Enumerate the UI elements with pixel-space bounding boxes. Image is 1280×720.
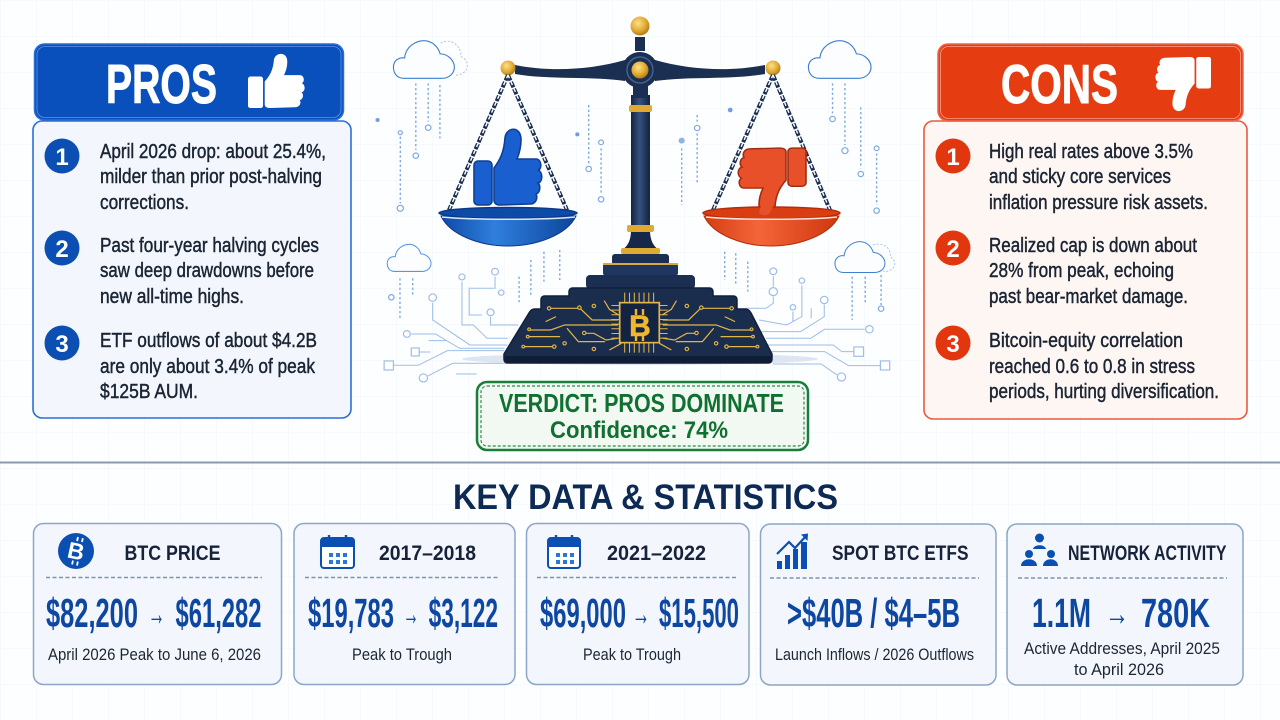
cloud lower left [387, 244, 431, 271]
bitcoin circuit chip [522, 298, 759, 351]
pro 2: saw deep drawdowns before [100, 260, 314, 282]
con 2: 28% from peak, echoing [989, 260, 1174, 282]
con 2 [936, 230, 1197, 308]
stat card: BTC price: April 2026 Peak to June 6, 2026 [48, 645, 261, 664]
stat card: network activity: to April 2026 [1074, 660, 1164, 679]
panel: pros [33, 44, 351, 418]
con 2: Realized cap is down about [989, 235, 1197, 257]
red thumbs down on right pan [738, 148, 806, 214]
stat card: 2017-2018: → [403, 595, 419, 633]
scale column and beam [500, 16, 780, 254]
pro 3: ETF outflows of about $4.2B [100, 330, 317, 352]
pros header [34, 44, 344, 120]
con 2: 2 [946, 236, 960, 263]
chains [449, 75, 830, 210]
stat card: 2021-2022: → [632, 595, 650, 633]
circuit lines [384, 268, 890, 382]
pro 2: new all-time highs. [100, 286, 244, 308]
stat card: 2021-2022: $69,000 [540, 590, 626, 636]
stat card: 2017-2018: $19,783 [308, 590, 394, 636]
cons header [938, 44, 1243, 121]
stat card: BTC price: $61,282 [176, 590, 262, 636]
stat card: BTC price: → [148, 595, 165, 633]
right pan [703, 200, 840, 246]
cons header: CONS [1001, 53, 1118, 115]
data drips [376, 83, 884, 320]
icon: calendar [321, 535, 354, 568]
con 3: periods, hurting diversification. [989, 381, 1219, 403]
stat card: 2017-2018 [294, 524, 515, 684]
cloud top right [808, 41, 871, 78]
stat card: network activity [1007, 524, 1243, 685]
stat card: network activity: → [1105, 595, 1129, 633]
cloud lower right [835, 242, 895, 272]
heading: key data and statistics: KEY DATA & STATISTICS [453, 478, 838, 517]
con 3: 3 [946, 331, 960, 358]
con 1: 1 [946, 144, 960, 171]
stat card: BTC price [34, 524, 282, 684]
verdict headline: VERDICT: PROS DOMINATE [499, 388, 784, 418]
blue thumbs up on left pan [474, 129, 542, 205]
con 1 [936, 138, 1208, 214]
stat card: 2021-2022: Peak to Trough [583, 645, 681, 664]
stat card: spot BTC ETFs: Launch Inflows / 2026 Outflows [775, 645, 974, 664]
stat card: 2021-2022: $15,500 [659, 590, 739, 636]
icon: thumbs down [1155, 57, 1211, 111]
bitcoin symbol on chip: B [629, 310, 651, 343]
stat card: spot BTC ETFs: >$40B / $4–5B [787, 590, 960, 636]
icon: connected people [1021, 534, 1058, 566]
icon: bitcoin coin: B [65, 537, 87, 565]
stat card: 2017-2018: 2017–2018 [379, 542, 476, 565]
pro 3: 3 [55, 331, 69, 358]
pros list body [33, 121, 351, 418]
pros header: PROS [106, 53, 217, 115]
plinth shadow [462, 353, 818, 365]
con 3 [936, 326, 1219, 403]
stat card: BTC price: $82,200 [46, 590, 138, 636]
cons list body [924, 121, 1247, 419]
balance scale [439, 16, 840, 365]
icon: bitcoin coin [58, 533, 94, 569]
pro 3 [44, 326, 317, 403]
pro 1: April 2026 drop: about 25.4%, [100, 141, 326, 163]
confidence value: Confidence: 74% [550, 417, 728, 444]
pro 2: 2 [55, 236, 69, 263]
stepped base [504, 254, 772, 363]
pro 1 [44, 138, 326, 214]
con 2: past bear-market damage. [989, 286, 1188, 308]
cloud top left [393, 41, 467, 78]
verdict badge [477, 382, 808, 450]
decorative network backdrop: clouds, data drips and circuit lines [376, 41, 895, 382]
pro 1: corrections. [100, 192, 189, 214]
stat card: spot BTC ETFs: SPOT BTC ETFS [832, 542, 968, 565]
stat card: network activity: NETWORK ACTIVITY [1068, 542, 1226, 565]
left pan [439, 208, 577, 246]
icon: rising bar chart [777, 534, 808, 569]
stat card: BTC price: BTC PRICE [124, 542, 220, 565]
icon: calendar [548, 535, 580, 568]
panel: cons [924, 44, 1247, 419]
stat card: 2017-2018: Peak to Trough [352, 645, 452, 664]
stat card: 2017-2018: $3,122 [429, 590, 498, 636]
con 1: and sticky core services [989, 166, 1171, 188]
con 3: reached 0.6 to 0.8 in stress [989, 356, 1195, 378]
pro 3: are only about 3.4% of peak [100, 356, 316, 378]
con 3: Bitcoin-equity correlation [989, 330, 1183, 352]
pro 3: $125B AUM. [100, 381, 198, 403]
stat card: 2021-2022 [526, 524, 749, 684]
stat card: network activity: Active Addresses, April 2025 [1024, 639, 1220, 658]
stat card: 2021-2022: 2021–2022 [607, 542, 706, 565]
stat card: network activity: 1.1M [1032, 590, 1091, 636]
pro 1: milder than prior post-halving [100, 166, 322, 188]
pro 1: 1 [55, 144, 69, 171]
con 1: inflation pressure risk assets. [989, 192, 1208, 214]
stat card: spot BTC ETFs [760, 524, 996, 685]
icon: thumbs up [248, 54, 305, 108]
stat card: network activity: 780K [1141, 590, 1210, 636]
pro 2: Past four-year halving cycles [100, 235, 319, 257]
con 1: High real rates above 3.5% [989, 141, 1193, 163]
pro 2 [44, 230, 319, 308]
